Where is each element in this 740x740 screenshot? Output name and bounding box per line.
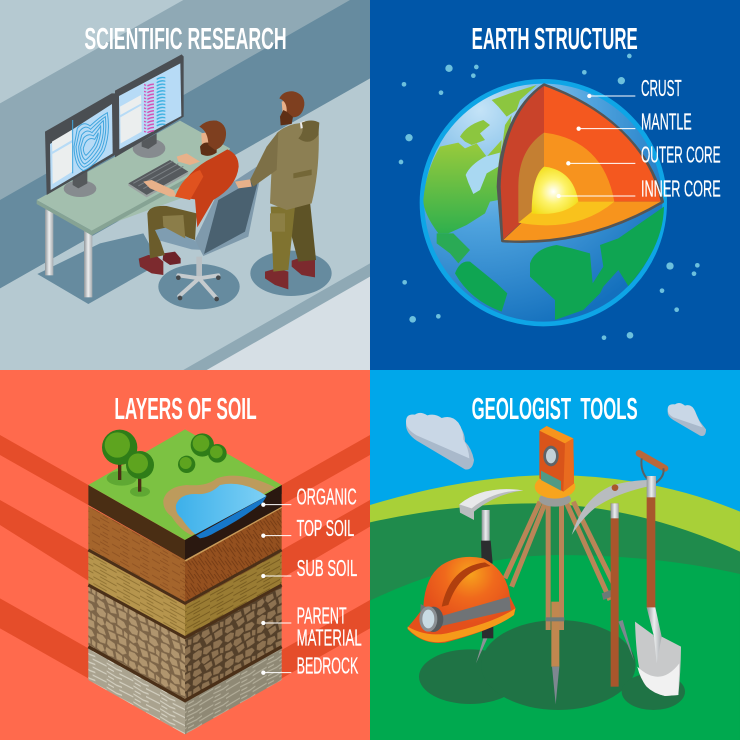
label: sub soil: SUB SOIL — [297, 555, 357, 581]
pickaxe — [572, 480, 648, 687]
stars — [399, 54, 700, 340]
label: parent material — [298, 607, 362, 646]
keyboard — [128, 160, 188, 197]
bedrock layer — [88, 648, 282, 734]
background chevron bands — [0, 435, 370, 678]
panel: scientific research — [0, 0, 370, 370]
organic layer — [88, 485, 282, 560]
label lines — [557, 94, 635, 198]
globe — [422, 81, 665, 324]
trees and bushes — [102, 430, 227, 497]
shovel — [635, 453, 681, 696]
label: top soil: TOP SOIL — [297, 515, 354, 541]
label: parent material: MATERIAL — [297, 625, 362, 651]
top soil layer — [88, 506, 282, 603]
earth cutaway: crust, mantle, outer core, inner core — [498, 85, 662, 241]
standing person — [235, 91, 332, 296]
rock hammer — [459, 489, 523, 663]
tripod — [505, 502, 634, 704]
seated person and chair — [139, 120, 262, 309]
hills — [370, 475, 740, 740]
right monitor with waveforms — [115, 54, 184, 158]
pond — [163, 476, 282, 540]
label: crust: CRUST — [641, 75, 682, 101]
left monitor with contour map — [45, 93, 115, 197]
clouds — [406, 403, 706, 469]
ground shadows — [419, 620, 685, 710]
parent material layer — [88, 587, 282, 701]
hard hat with headlamp — [408, 557, 516, 643]
title: scientific research: SCIENTIFIC RESEARCH — [84, 22, 287, 56]
label: parent material: PARENT — [297, 602, 347, 628]
label: bedrock: BEDROCK — [297, 652, 359, 678]
desk — [37, 121, 230, 304]
label: mantle: MANTLE — [641, 108, 692, 134]
label lines — [262, 503, 291, 674]
sub soil layer — [88, 552, 282, 638]
theodolite instrument — [535, 426, 575, 507]
grass top surface — [88, 429, 282, 540]
panel: layers of soil — [0, 370, 370, 740]
label: organic: ORGANIC — [297, 483, 357, 509]
title: layers of soil: LAYERS OF SOIL — [114, 392, 257, 426]
panel: earth structure — [370, 0, 740, 370]
panel: geologist tools — [370, 370, 740, 740]
